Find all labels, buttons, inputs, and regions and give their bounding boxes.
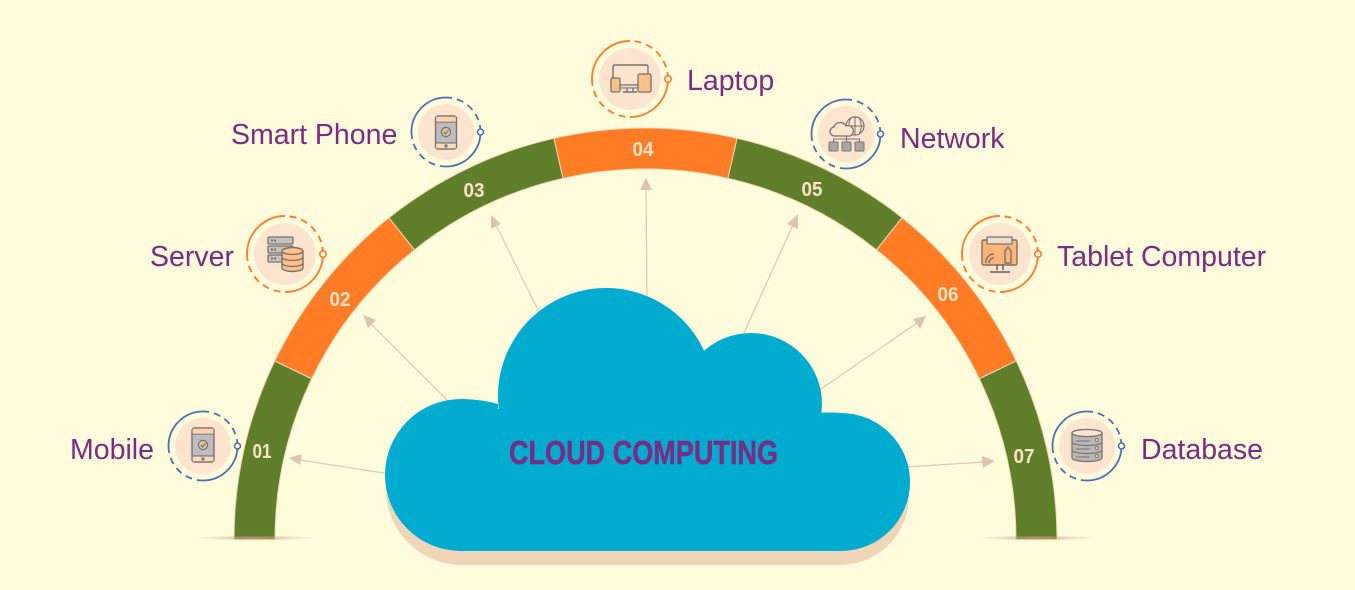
arrows from cloud to arc xyxy=(289,178,995,474)
semicircle arc xyxy=(234,128,1057,540)
icon badge: tablet computer xyxy=(962,216,1041,292)
item: Server xyxy=(150,216,326,292)
arrow 03 xyxy=(491,215,540,314)
item: Smart Phone xyxy=(231,98,484,166)
cloud shadow xyxy=(386,478,909,565)
label: Tablet Computer xyxy=(1057,241,1267,273)
number 07: 07 xyxy=(1014,446,1034,468)
segment 03 xyxy=(389,138,563,250)
item: Laptop xyxy=(592,41,774,117)
cloud title: CLOUD COMPUTING xyxy=(509,435,778,472)
segment 06 xyxy=(876,218,1016,379)
cloud body xyxy=(385,288,910,551)
icon badge: database xyxy=(1052,412,1124,480)
segment 01 xyxy=(234,361,312,540)
icon badge: network xyxy=(812,100,884,168)
cloud xyxy=(385,288,910,565)
number 06: 06 xyxy=(938,284,958,306)
label: Database xyxy=(1141,434,1263,466)
segment 05 xyxy=(728,138,902,250)
item: Mobile xyxy=(70,412,240,480)
item: Tablet Computer xyxy=(962,216,1267,292)
label: Server xyxy=(150,241,234,273)
segment 07 xyxy=(979,361,1057,540)
icon badge: server xyxy=(247,216,326,292)
number 03: 03 xyxy=(464,180,484,202)
number 02: 02 xyxy=(330,289,350,311)
icon badge: mobile xyxy=(168,412,240,480)
segment numbers xyxy=(252,139,1034,468)
item: Database xyxy=(1052,412,1263,480)
arrow 07 xyxy=(905,456,995,468)
segment 02 xyxy=(275,218,414,379)
label: Network xyxy=(900,123,1005,155)
arrow 04 xyxy=(640,178,652,300)
arrow 05 xyxy=(743,214,798,335)
label: Smart Phone xyxy=(231,119,397,151)
label: Laptop xyxy=(687,65,774,97)
number 01: 01 xyxy=(252,441,272,463)
number 04: 04 xyxy=(632,139,654,161)
number 05: 05 xyxy=(802,179,822,201)
icon badge: devices xyxy=(592,41,671,117)
icon badge: smart phone xyxy=(412,98,484,166)
item: Network xyxy=(812,100,1005,168)
label: Mobile xyxy=(70,434,154,466)
segment 04 xyxy=(554,128,737,178)
ground shadows xyxy=(194,536,1097,540)
arrow 06 xyxy=(818,316,926,391)
arrow 02 xyxy=(363,315,450,403)
arrow 01 xyxy=(289,454,390,474)
